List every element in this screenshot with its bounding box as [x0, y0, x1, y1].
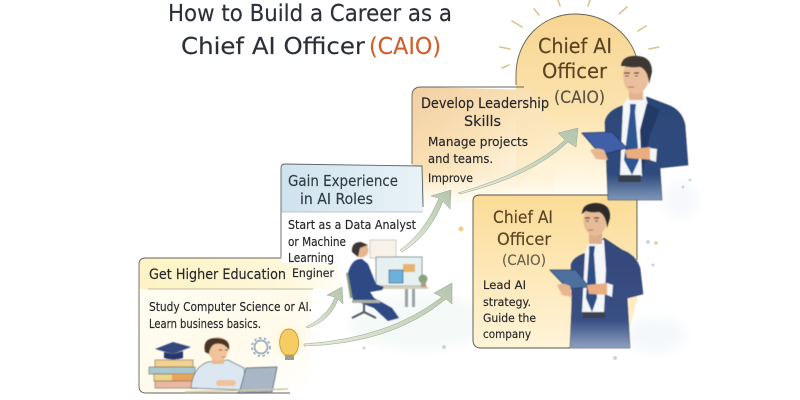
- panel: Get Higher Education: Learn business basics.: [149, 317, 261, 331]
- panel: Gain Experience in AI Roles: or Machine: [288, 235, 346, 249]
- background wash: [350, 182, 698, 353]
- panel: Gain Experience in AI Roles: Learning: [288, 251, 334, 265]
- panel: Chief AI Officer arch: Chief AI: [538, 34, 612, 58]
- panel: Get Higher Education: [139, 258, 340, 393]
- panel: Gain Experience in AI Roles: Start as a Data Analyst: [288, 218, 416, 232]
- panel: Chief AI Officer lower: company: [483, 327, 531, 341]
- panel: Chief AI Officer lower: Officer: [497, 230, 551, 250]
- panel: Develop Leadership Skills: and teams.: [428, 151, 493, 166]
- icon: analyst at desk: [346, 240, 428, 321]
- arrow: education to experience: [306, 287, 343, 328]
- arrow: education to CAIO: [304, 283, 452, 346]
- decorative paint specks: [362, 178, 692, 360]
- arrow: leadership to CAIO: [458, 128, 578, 194]
- title: How to Build a Career as a: [168, 1, 452, 27]
- panel: Develop Leadership Skills: Improve: [428, 171, 473, 185]
- panel: Chief AI Officer lower: (CAIO): [502, 253, 546, 269]
- icon: gear: [252, 338, 270, 356]
- icon: light bulb: [275, 326, 303, 360]
- panel: Develop Leadership Skills: Skills: [464, 114, 501, 130]
- panel: Develop Leadership Skills: [412, 87, 560, 205]
- panel: Gain Experience in AI Roles: Enginer: [292, 266, 334, 280]
- panel: Gain Experience in AI Roles: Gain Experience: [288, 172, 398, 190]
- panel: Chief AI Officer arch: Officer: [542, 59, 608, 83]
- panel: Get Higher Education: Get Higher Education: [149, 267, 286, 283]
- icon: student at laptop: [185, 337, 288, 393]
- illustration: executive lower: [550, 203, 643, 348]
- panel: Chief AI Officer lower: [473, 195, 637, 348]
- title: [168, 1, 452, 60]
- title: (CAIO): [369, 34, 441, 60]
- title: Chief AI Officer: [181, 34, 366, 60]
- panel: Chief AI Officer arch: (CAIO): [554, 88, 605, 108]
- panel: Develop Leadership Skills: Manage projects: [428, 134, 528, 149]
- panel: Chief AI Officer lower: Guide the: [483, 311, 536, 325]
- panel: Chief AI Officer lower: Chief AI: [493, 208, 553, 228]
- panel: Chief AI Officer arch: [500, 0, 659, 205]
- panel: Develop Leadership Skills: Develop Leadership: [421, 96, 549, 112]
- panel: Gain Experience in AI Roles: [281, 164, 423, 280]
- arrow: experience to leadership: [400, 190, 451, 252]
- illustration: executive upper: [582, 56, 688, 200]
- panel: Get Higher Education: Study Computer Science or AI.: [149, 299, 312, 314]
- icon: graduation cap on books: [149, 342, 198, 388]
- panel: Chief AI Officer lower: strategy.: [483, 295, 531, 309]
- panel: Gain Experience in AI Roles: in AI Roles: [300, 190, 373, 208]
- panel: Chief AI Officer lower: Lead AI: [483, 278, 526, 292]
